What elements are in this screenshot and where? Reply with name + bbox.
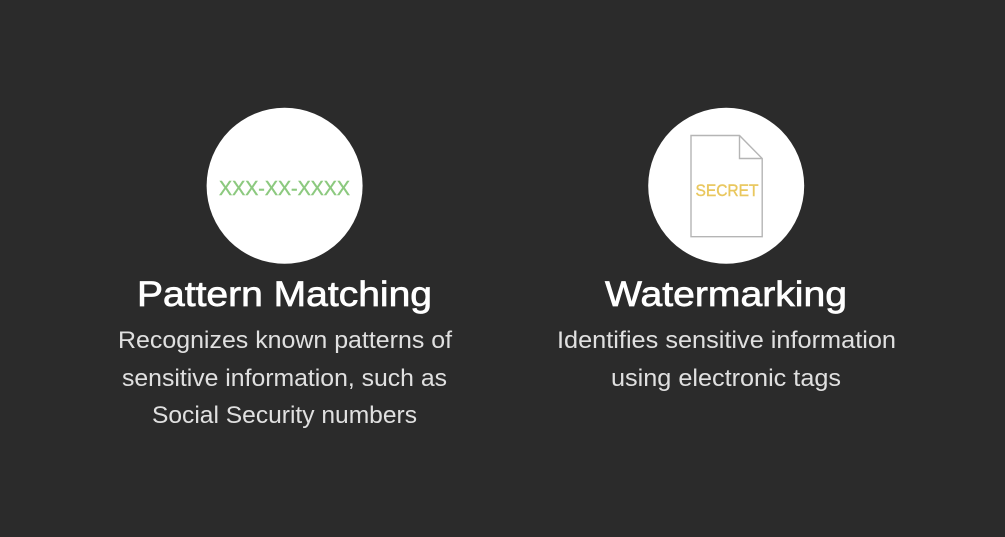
text: pattern matching description: Recognizes known patterns of bbox=[118, 327, 452, 354]
icon: pattern circle bbox=[207, 108, 363, 264]
text: pattern matching description: sensitive information, such as bbox=[122, 365, 447, 392]
text: pattern matching description: Social Security numbers bbox=[152, 402, 417, 429]
panel: watermarking bbox=[557, 108, 896, 392]
icon: secret document circle bbox=[648, 108, 804, 264]
panel: pattern matching bbox=[118, 108, 452, 429]
text: watermarking description bbox=[557, 327, 896, 392]
icon: secret document circle: SECRET bbox=[696, 181, 758, 200]
heading: pattern matching: Pattern Matching bbox=[137, 275, 432, 314]
heading: watermarking: Watermarking bbox=[605, 275, 847, 314]
text: pattern matching description bbox=[118, 327, 452, 429]
text: watermarking description: Identifies sensitive information bbox=[557, 327, 896, 354]
text: watermarking description: using electronic tags bbox=[611, 365, 841, 392]
icon: pattern circle: XXX-XX-XXXX bbox=[219, 178, 350, 200]
